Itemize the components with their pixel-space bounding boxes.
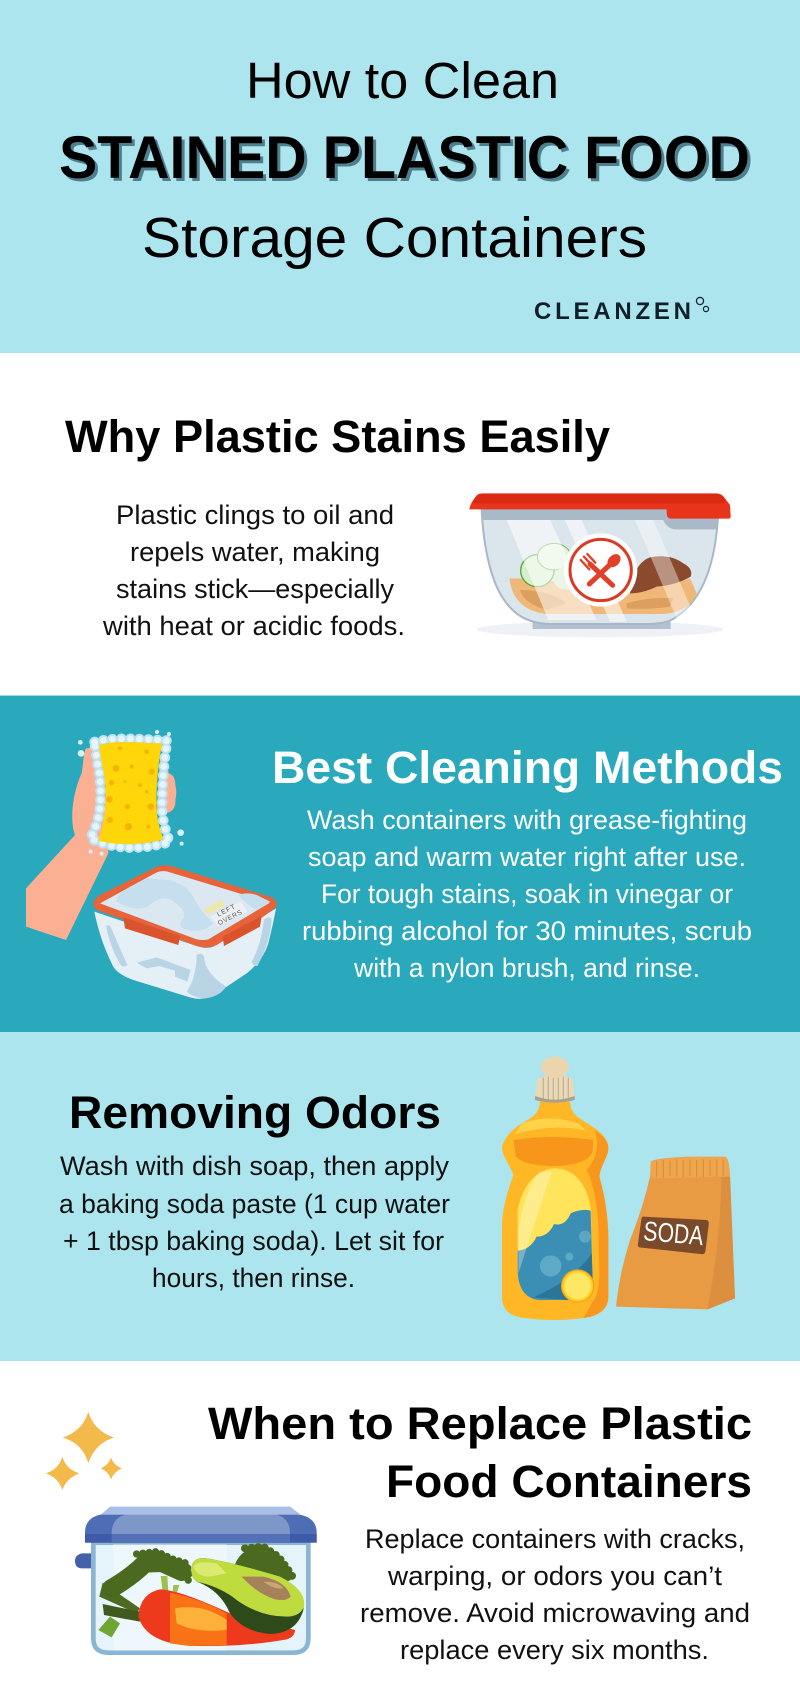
text: cleaning methods body: Wash containers with grease-fighting xyxy=(307,805,747,835)
logo: Cleanzen: CLEANZEN xyxy=(534,298,691,325)
text: removing odors body: Wash with dish soap, then apply xyxy=(60,1151,450,1181)
panel: best cleaning methods xyxy=(0,695,800,1032)
icon: dish soap bottle xyxy=(502,1057,608,1320)
icon: sparkles xyxy=(46,1412,122,1490)
heading: when to replace plastic food containers xyxy=(208,1398,752,1507)
text: cleaning methods body: with a nylon brush, and rinse. xyxy=(353,953,700,983)
text: cleaning methods body: rubbing alcohol for 30 minutes, scrub xyxy=(302,916,752,946)
text: cleaning methods body: soap and warm water right after use. xyxy=(308,842,746,872)
broccoli back xyxy=(237,1552,288,1587)
text: when to replace body: warping, or odors you can’t xyxy=(387,1561,723,1591)
text: removing odors body xyxy=(59,1151,450,1293)
icon: glass container with red lid xyxy=(469,493,731,637)
text: when to replace body: remove. Avoid microwaving and xyxy=(360,1598,750,1628)
title line 2 with shadow: STAINED PLASTIC FOOD xyxy=(59,124,750,191)
label: leftovers: LEFT xyxy=(216,903,237,919)
panel: why plastic stains xyxy=(0,353,800,695)
text: when to replace body: Replace containers with cracks, xyxy=(365,1524,745,1554)
leaves xyxy=(98,1617,120,1637)
text: removing odors body: hours, then rinse. xyxy=(152,1263,355,1293)
label: soda: SODA xyxy=(642,1215,705,1251)
lid xyxy=(102,1507,300,1514)
title line 2 with shadow: STAINED PLASTIC FOOD xyxy=(62,127,753,194)
text: why plastic stains body: stains stick—especially xyxy=(116,574,395,604)
heading: best cleaning methods: Best Cleaning Methods xyxy=(272,742,783,793)
carrot xyxy=(138,1589,295,1646)
food container with orange lid xyxy=(93,865,277,999)
text: cleaning methods body xyxy=(302,805,752,983)
broccoli front xyxy=(112,1563,182,1588)
text: why plastic stains body: with heat or acidic foods. xyxy=(102,611,405,641)
text: cleaning methods body: For tough stains, soak in vinegar or xyxy=(321,879,733,909)
label: leftovers xyxy=(213,902,244,927)
icon: baking soda bag xyxy=(616,1157,735,1309)
text: removing odors body: a baking soda paste (1 cup water xyxy=(59,1189,450,1219)
heading: when to replace plastic food containers: When to Replace Plastic xyxy=(208,1398,752,1449)
title line 1: How to Clean xyxy=(246,52,559,109)
icon: hand with soapy sponge xyxy=(26,730,277,999)
panel: when to replace xyxy=(0,1361,800,1681)
icon: food container with vegetables xyxy=(75,1507,317,1653)
label: leftovers: OVERS xyxy=(217,909,244,927)
heading: why plastic stains easily: Why Plastic Stains Easily xyxy=(65,411,610,462)
broccoli stems xyxy=(161,1576,179,1593)
text: removing odors body: + 1 tbsp baking soda). Let sit for xyxy=(63,1226,444,1256)
text: why plastic stains body xyxy=(102,500,405,641)
avocado xyxy=(191,1558,304,1634)
heading: removing odors: Removing Odors xyxy=(69,1087,441,1138)
panel: removing odors xyxy=(0,1032,800,1361)
bottle cap xyxy=(535,1057,575,1103)
panel: header xyxy=(0,0,800,353)
heading: when to replace plastic food containers: Food Containers xyxy=(386,1456,752,1507)
text: when to replace body: replace every six months. xyxy=(400,1635,709,1665)
icon: crossed fork and spoon xyxy=(581,552,623,585)
text: why plastic stains body: Plastic clings to oil and xyxy=(116,500,394,530)
text: when to replace body xyxy=(360,1524,750,1665)
title line 3: Storage Containers xyxy=(142,206,647,270)
text: why plastic stains body: repels water, making xyxy=(130,537,380,567)
